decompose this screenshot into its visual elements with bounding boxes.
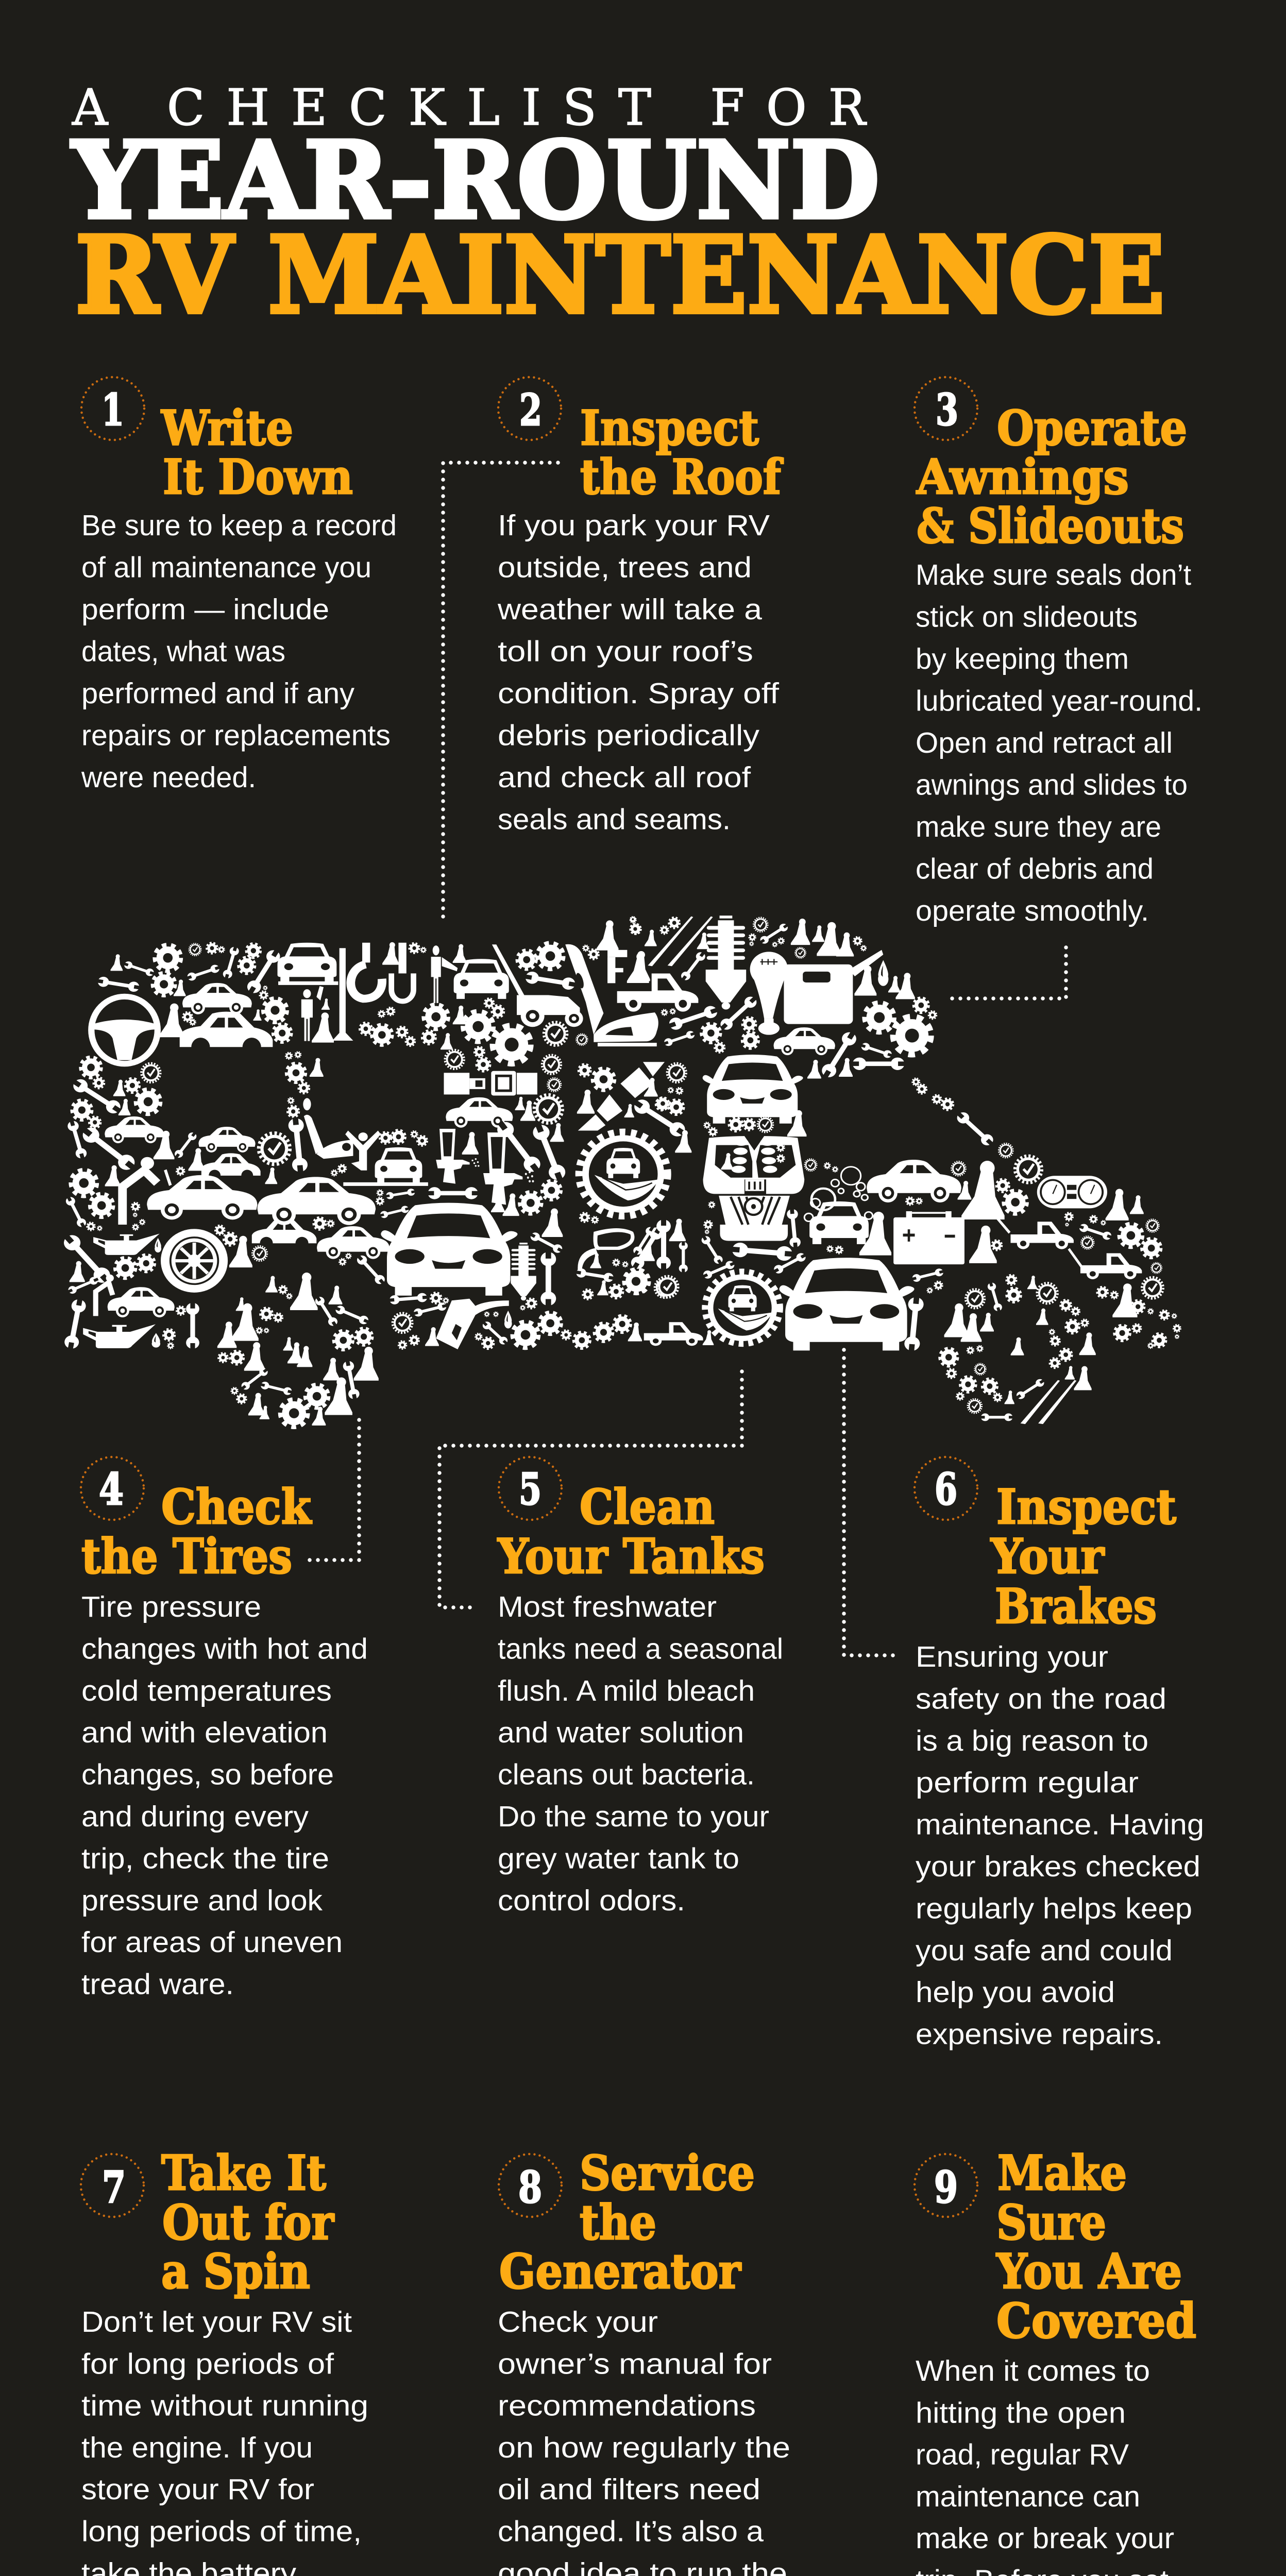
heading: You Are: [996, 2243, 1182, 2299]
body text: road, regular RV: [916, 2438, 1129, 2471]
panel: step 8 service the generator: [498, 2145, 807, 2576]
body text: outside, trees and: [498, 551, 752, 584]
body text: your brakes checked: [916, 1850, 1200, 1883]
heading: [990, 1479, 1176, 1634]
body text: recommendations: [498, 2389, 756, 2422]
title line: RV Maintenance: RV MAINTENANCE: [75, 214, 1165, 337]
number badge 2: [498, 377, 561, 440]
heading: Write: [161, 400, 293, 456]
body text: Ensuring your: [916, 1640, 1108, 1673]
body text: tanks need a seasonal: [498, 1632, 783, 1665]
heading: Clean: [580, 1479, 715, 1535]
heading: Service: [580, 2145, 755, 2201]
body text: flush. A mild bleach: [498, 1674, 755, 1707]
icon cluster: window surrounds: [259, 1047, 568, 1255]
heading: Brakes: [995, 1578, 1157, 1634]
icon cluster: cab front and front wheel ring: [614, 1078, 1181, 1421]
body text: and with elevation: [81, 1716, 328, 1749]
heading: the Tires: [81, 1528, 292, 1584]
panel: step 5 clean your tanks: [497, 1457, 783, 1917]
body text: [81, 509, 397, 794]
body text: is a big reason to: [916, 1724, 1148, 1757]
number badge 4: [81, 1457, 144, 1520]
heading: the: [580, 2194, 656, 2250]
icon: front-view car upper: [703, 1055, 803, 1124]
icon: tow trucks: [995, 1215, 1142, 1279]
number badge 6: 6: [935, 1464, 957, 1515]
panel: step 3 operate awnings and slideouts: [915, 377, 1203, 927]
icon: wiper blades: [648, 917, 1076, 1424]
dotted connector: step 3 to awning: [947, 947, 1066, 998]
dotted connector: step 2 to roof: [443, 463, 558, 924]
panel: step 2 inspect the roof: [497, 377, 783, 836]
icon: sedan: [257, 1177, 376, 1225]
body text: control odors.: [498, 1884, 685, 1917]
heading: & Slideouts: [917, 498, 1184, 554]
body text: When it comes to: [916, 2354, 1150, 2387]
icon: lawn mower: [492, 944, 583, 1027]
heading: Covered: [996, 2293, 1196, 2349]
icon: road sign diamonds: [578, 1062, 665, 1131]
body text: pressure and look: [81, 1884, 323, 1917]
body text: make sure they are: [916, 810, 1161, 843]
heading: Your: [990, 1528, 1105, 1584]
icon: oil can and drop: [93, 1234, 161, 1255]
body text: tread ware.: [81, 1968, 234, 2001]
body text: for long periods of: [81, 2347, 334, 2380]
body text: grey water tank to: [498, 1842, 739, 1875]
icon: engine: [703, 1136, 804, 1241]
body text: Check your: [498, 2306, 658, 2338]
heading: [161, 400, 353, 505]
body text: on how regularly the: [498, 2431, 790, 2464]
body text: stick on slideouts: [916, 601, 1138, 634]
heading: [161, 2145, 334, 2299]
body text: expensive repairs.: [916, 2018, 1163, 2051]
icon: front-view car lower: [779, 1258, 915, 1350]
body text: time without running: [81, 2389, 368, 2422]
body text: lubricated year-round.: [916, 684, 1203, 717]
number badge 5: 5: [519, 1464, 542, 1515]
body text: If you park your RV: [498, 509, 770, 542]
body text: for areas of uneven: [81, 1926, 343, 1959]
number badge 8: 8: [518, 2162, 542, 2213]
body text: repairs or replacements: [81, 719, 391, 752]
body text: [916, 558, 1203, 927]
body text: Don’t let your RV sit: [81, 2306, 352, 2338]
icon: steering wheel: [91, 996, 158, 1064]
number badge 7: [81, 2154, 144, 2217]
body text: safety on the road: [916, 1682, 1166, 1715]
heading: Your Tanks: [497, 1528, 765, 1584]
body text: Open and retract all: [916, 726, 1173, 759]
title line: Year-Round: YEAR-ROUND: [71, 119, 879, 243]
icon cluster: under floor and rear wheel ring: [217, 1251, 642, 1427]
body text: debris periodically: [498, 719, 760, 752]
heading: Make: [997, 2145, 1127, 2201]
icon: spray guns: [436, 1129, 534, 1205]
body text: changes with hot and: [81, 1632, 368, 1665]
body text: [81, 1590, 368, 2001]
body text: hitting the open: [916, 2396, 1126, 2429]
body text: regularly helps keep: [916, 1892, 1192, 1925]
icon: small shock absorber: [511, 1243, 536, 1300]
body text: [81, 2306, 368, 2576]
icon: car wash with bubbles: [804, 1167, 873, 1244]
heading: Out for: [162, 2194, 334, 2250]
number badge 3: [915, 377, 977, 440]
body text: long periods of time,: [81, 2515, 362, 2548]
icon: car on lift with mechanic: [278, 943, 353, 1041]
body text: by keeping them: [916, 642, 1129, 675]
number badge 8: [499, 2154, 562, 2217]
body text: clear of debris and: [916, 852, 1154, 885]
icon: sedan on hood: [867, 1160, 961, 1202]
number badge 4: 4: [99, 1464, 124, 1515]
icon: side mirror: [578, 1228, 634, 1272]
icon: person with arms raised: [345, 1131, 381, 1171]
icon: tire: [161, 1229, 228, 1293]
panel: step 6 inspect your brakes: [915, 1457, 1204, 2051]
body text: cleans out bacteria.: [498, 1758, 755, 1791]
body text: dates, what was: [81, 635, 285, 668]
body text: performed and if any: [81, 677, 355, 710]
icon: car seat: [565, 944, 658, 1046]
body text: and check all roof: [498, 761, 751, 794]
icon: hand holding car badge lower: [705, 1272, 780, 1344]
number badge 5: [499, 1457, 562, 1520]
body text: owner’s manual for: [498, 2347, 772, 2380]
body text: Make sure seals don’t: [916, 558, 1191, 591]
body text: Do the same to your: [498, 1800, 769, 1833]
heading: Generator: [499, 2243, 741, 2299]
illustration: RV silhouette built from automotive icons: [60, 916, 1181, 1427]
body text: help you avoid: [916, 1976, 1115, 2009]
body text: [916, 2354, 1202, 2576]
body text: condition. Spray off: [498, 677, 779, 710]
body text: make or break your: [916, 2522, 1174, 2555]
body text: [498, 1590, 783, 1917]
icon: standing man with car: [431, 945, 509, 1003]
body text: [497, 509, 779, 836]
icon: gear shift knob: [750, 952, 788, 1035]
icon: pickup truck: [617, 973, 698, 1012]
heading: the Roof: [580, 449, 783, 505]
icon: hand holding car badge: [579, 1132, 667, 1216]
body text: trip, check the tire: [81, 1842, 329, 1875]
body text: you safe and could: [916, 1934, 1173, 1967]
number badge 6: [915, 1457, 977, 1520]
icon: crash test seat: [303, 1098, 353, 1159]
body text: cold temperatures: [81, 1674, 332, 1707]
heading: Check: [161, 1479, 312, 1535]
panel: step 7 take it out for a spin: [81, 2145, 368, 2576]
number badge 1: 1: [101, 384, 124, 435]
heading: Operate: [997, 400, 1187, 456]
body text: the engine. If you: [81, 2431, 313, 2464]
RV left half icons: [60, 917, 674, 1427]
icon: mechanic at open hood with car: [123, 1157, 257, 1225]
panel: step 4 check the tires: [81, 1457, 368, 2001]
body text: operate smoothly.: [916, 894, 1149, 927]
number badge 7: 7: [102, 2162, 126, 2213]
heading: a Spin: [161, 2243, 310, 2299]
dotted connector: step 6 to brakes: [844, 1350, 899, 1655]
icon: tow hook: [351, 943, 382, 999]
heading: [916, 400, 1187, 554]
icon cluster: around hand badge: [575, 1064, 674, 1299]
heading: Awnings: [916, 449, 1129, 505]
number badge 9: 9: [934, 2162, 958, 2213]
heading: Take It: [161, 2145, 326, 2201]
dotted connector: step 5 to tanks: [439, 1371, 742, 1607]
icon: front-view car: [381, 1203, 517, 1296]
icon: dashboard gauges: [1037, 1176, 1107, 1208]
panel: step 9 make sure you are covered: [915, 2145, 1202, 2576]
RV right half icons: [614, 916, 1181, 1424]
title line: A Checklist For: A CHECKLIST FOR: [72, 79, 867, 137]
body text: of all maintenance you: [81, 551, 371, 584]
icon: fuel nozzle and drop: [436, 1299, 512, 1349]
body text: maintenance. Having: [916, 1808, 1204, 1841]
number badge 9: [915, 2154, 977, 2217]
icon: small pickup: [644, 1322, 703, 1346]
body text: awnings and slides to: [916, 769, 1188, 802]
body text: weather will take a: [497, 593, 762, 626]
icon: seat belt: [444, 1071, 537, 1096]
heading: Sure: [996, 2194, 1106, 2250]
heading: Inspect: [580, 400, 759, 456]
heading: [499, 2145, 755, 2299]
number badge 2: 2: [519, 384, 542, 435]
heading: Inspect: [996, 1479, 1176, 1535]
body text: changes, so before: [81, 1758, 334, 1791]
body text: Most freshwater: [498, 1590, 717, 1623]
icon: car on floor plate: [343, 1147, 428, 1186]
body text: maintenance can: [916, 2480, 1140, 2513]
body text: seals and seams.: [498, 803, 731, 836]
heading: [580, 400, 783, 505]
body text: perform regular: [916, 1766, 1139, 1799]
body text: [498, 2306, 807, 2576]
title: [71, 79, 1165, 337]
dotted connector: step 4 to tires: [307, 1420, 359, 1560]
icon cluster: cab roof gears and levers: [625, 917, 937, 1153]
icon: adjustable wrench: [607, 950, 627, 983]
heading: [81, 1479, 312, 1584]
body text: [916, 1640, 1204, 2051]
body text: perform — include: [81, 593, 329, 626]
icon cluster: roof gears, wrenches and levers: [96, 917, 650, 1063]
body text: changed. It’s also a: [498, 2515, 764, 2548]
body text: were needed.: [81, 761, 256, 794]
number badge 1: [81, 377, 144, 440]
icon: jerry can: [784, 950, 883, 1024]
body text: toll on your roof’s: [498, 635, 753, 668]
body text: and water solution: [498, 1716, 744, 1749]
icon: car battery: [893, 1211, 964, 1264]
body text: Be sure to keep a record: [81, 509, 397, 542]
heading: It Down: [163, 449, 353, 505]
number badge 3: 3: [936, 384, 958, 435]
body text: and during every: [81, 1800, 309, 1833]
icon: shackle: [392, 943, 414, 1001]
body text: Tire pressure: [81, 1590, 261, 1623]
heading: [497, 1479, 765, 1584]
heading: [996, 2145, 1196, 2349]
body text: oil and filters need: [498, 2473, 760, 2506]
icon cluster: rear wall of RV: [60, 1057, 390, 1350]
panel: step 1 write it down: [81, 377, 397, 794]
icon: large shock absorber: [706, 916, 746, 1010]
body text: store your RV for: [81, 2473, 314, 2506]
icon: mechanic with small car and oil can: [83, 1275, 175, 1348]
